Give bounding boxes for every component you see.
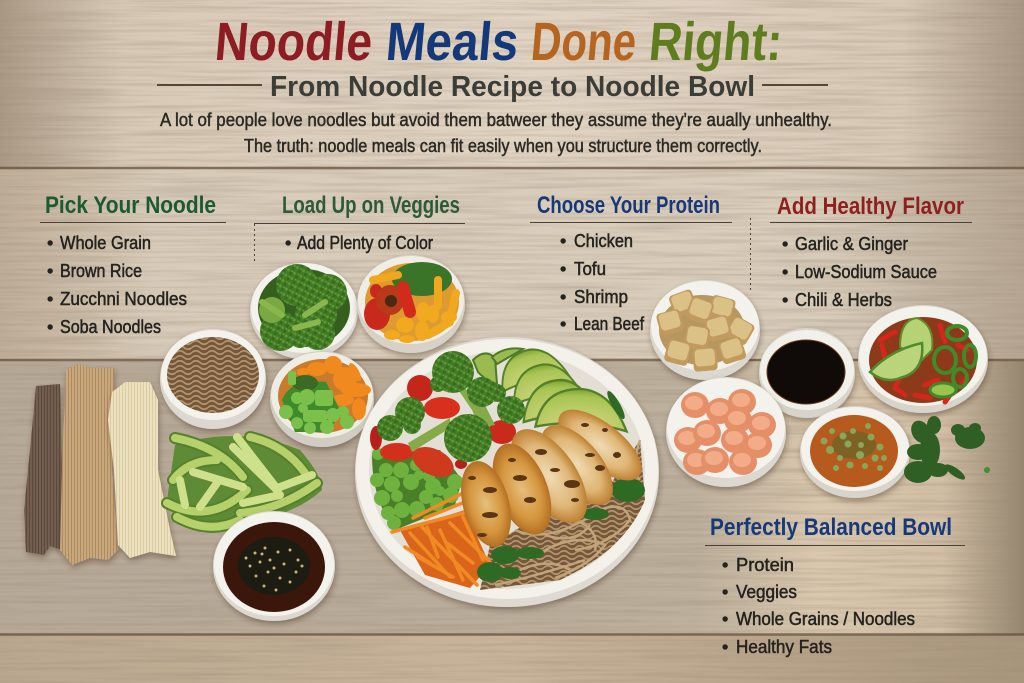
panel: choose your protein: Lean Beef xyxy=(574,314,645,334)
bowl: tofu xyxy=(650,280,760,380)
bowl: chili and lime xyxy=(858,305,988,413)
panel: pick your noodle: Whole Grain xyxy=(60,233,151,253)
panel: pick your noodle: • xyxy=(47,261,53,281)
panel: load up on veggies xyxy=(254,192,465,262)
bowl: red sauce with herbs xyxy=(800,406,910,498)
panel: choose your protein: Shrimp xyxy=(574,287,628,307)
panel: choose your protein: Tofu xyxy=(574,259,606,279)
panel: pick your noodle xyxy=(40,192,226,337)
panel: pick your noodle: Soba Noodles xyxy=(60,317,161,337)
panel: choose your protein: Chicken xyxy=(574,231,633,251)
bowl: sesame dressing xyxy=(213,511,335,621)
broccoli xyxy=(408,418,450,452)
bowl: soy sauce xyxy=(759,328,855,418)
panel: pick your noodle: • xyxy=(47,317,53,337)
panel: load up on veggies: Load Up on Veggies xyxy=(282,192,460,219)
bowl: broccoli xyxy=(250,263,358,359)
panel: add healthy flavor: • xyxy=(782,234,788,254)
title: Noodle xyxy=(213,12,375,72)
avocado slices xyxy=(473,343,629,431)
panel: add healthy flavor: Add Healthy Flavor xyxy=(777,193,964,220)
panel: perfectly balanced bowl: Protein xyxy=(736,555,794,575)
noodles in bowl xyxy=(480,440,645,590)
panel: choose your protein: • xyxy=(560,287,566,307)
bowl: colorful peppers xyxy=(357,255,465,353)
panel: pick your noodle: Brown Rice xyxy=(60,261,142,281)
panel: choose your protein: • xyxy=(560,314,566,334)
title: Done xyxy=(529,12,639,72)
panel: add healthy flavor: Low-Sodium Sauce xyxy=(795,262,937,282)
panel: load up on veggies: Add Plenty of Color xyxy=(297,233,433,253)
panel: pick your noodle: • xyxy=(47,233,53,253)
panel: perfectly balanced bowl: • xyxy=(722,582,728,602)
panel: pick your noodle: Zucchni Noodles xyxy=(60,289,187,309)
panel: add healthy flavor: Garlic & Ginger xyxy=(795,234,908,254)
title: Right: xyxy=(647,12,785,72)
title xyxy=(213,12,785,72)
peas xyxy=(372,450,462,530)
panel: add healthy flavor: • xyxy=(782,290,788,310)
intro text: A lot of people love noodles but avoid them batweer they assume they're aually unhealthy. xyxy=(160,110,832,130)
panel: pick your noodle: Pick Your Noodle xyxy=(45,192,216,219)
intro text: The truth: noodle meals can fit easily when you structure them correctly. xyxy=(244,136,762,156)
panel: perfectly balanced bowl: Whole Grains / Noodles xyxy=(736,609,915,629)
panel: add healthy flavor: • xyxy=(782,262,788,282)
zucchini noodles xyxy=(167,436,322,530)
panel: perfectly balanced bowl: Healthy Fats xyxy=(736,637,832,657)
panel: perfectly balanced bowl: • xyxy=(722,609,728,629)
grilled chicken slices xyxy=(452,397,653,552)
panel: choose your protein: Choose Your Protein xyxy=(537,192,720,219)
intro text xyxy=(160,110,832,156)
bowl: soba noodles xyxy=(160,329,266,429)
subtitle: From Noodle Recipe to Noodle Bowl xyxy=(270,71,755,103)
panel: perfectly balanced bowl: Perfectly Balanced Bowl xyxy=(710,514,952,541)
panel: choose your protein xyxy=(530,192,750,334)
greens xyxy=(477,389,645,582)
herb sprig xyxy=(904,416,990,483)
carrots xyxy=(400,510,490,588)
panel: add healthy flavor xyxy=(770,193,972,310)
panel: pick your noodle: • xyxy=(47,289,53,309)
panel: add healthy flavor: Chili & Herbs xyxy=(795,290,892,310)
bowl: shrimp xyxy=(666,377,786,487)
noodle bundles xyxy=(24,364,176,565)
panel: choose your protein: • xyxy=(560,259,566,279)
panel: perfectly balanced bowl: • xyxy=(722,555,728,575)
panel: perfectly balanced bowl: • xyxy=(722,637,728,657)
title: Meals xyxy=(384,12,521,72)
panel: perfectly balanced bowl: Veggies xyxy=(736,582,797,602)
panel: perfectly balanced bowl xyxy=(705,514,965,657)
panel: load up on veggies: • xyxy=(285,233,291,253)
bowl: edamame and carrots xyxy=(270,351,374,447)
panel: choose your protein: • xyxy=(560,231,566,251)
main noodle bowl xyxy=(355,337,659,607)
tomatoes xyxy=(407,375,433,401)
